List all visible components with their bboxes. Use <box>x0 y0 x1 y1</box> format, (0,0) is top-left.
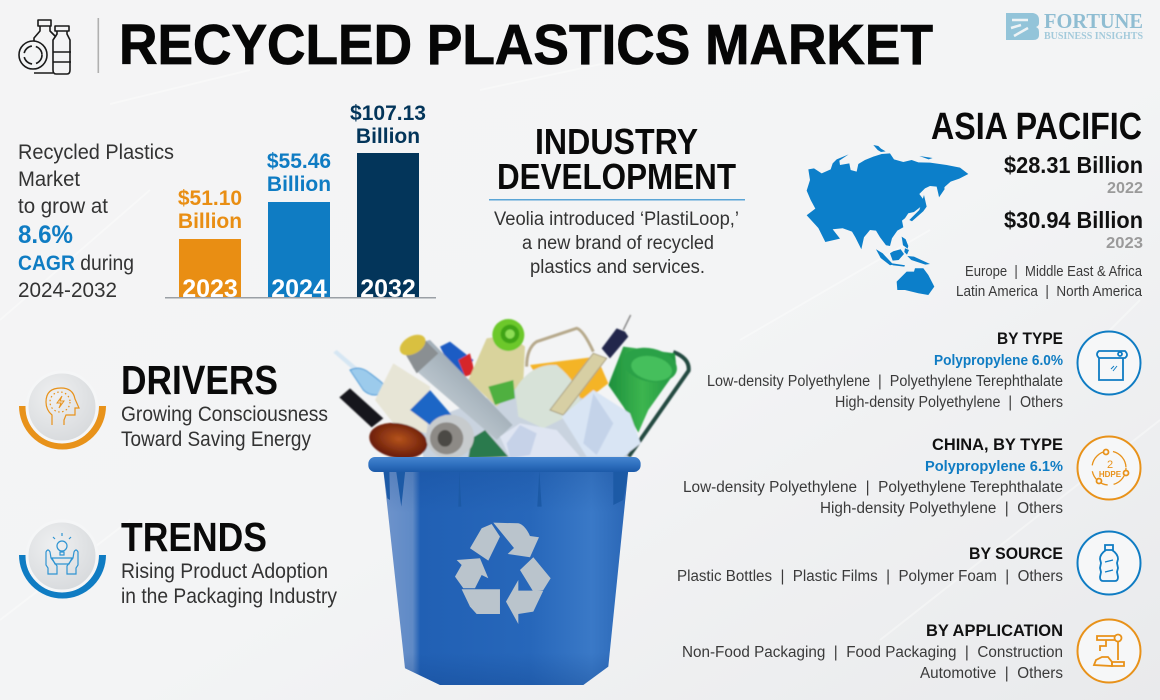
industry development: DEVELOPMENT <box>497 156 736 197</box>
bar 2024: Billion <box>267 173 331 196</box>
panel: drivers: Toward Saving Energy <box>121 428 311 451</box>
industry development: Veolia introduced ‘PlastiLoop,’ <box>494 209 739 230</box>
bar 2023: $51.10 <box>178 187 242 210</box>
segment: by application: Non-Food Packaging | Food Packaging | Construction <box>682 644 1063 661</box>
bar 2032 <box>350 102 426 303</box>
bar chart <box>165 102 436 303</box>
bar 2032: Billion <box>356 125 420 148</box>
segment: by application: BY APPLICATION <box>926 621 1063 640</box>
segment: China by type: High-density Polyethylene | Others <box>820 500 1063 517</box>
bar 2032: 2032 <box>360 275 416 303</box>
panel: drivers: DRIVERS <box>121 357 278 403</box>
segment: by type: High-density Polyethylene | Others <box>835 394 1063 411</box>
bar 2032: $107.13 <box>350 102 426 125</box>
segment: by source: BY SOURCE <box>969 544 1063 563</box>
bar 2023 <box>178 187 242 303</box>
bin contents: plastic waste <box>333 315 689 463</box>
header icon: recycled bottles <box>19 20 71 74</box>
panel: trends: Rising Product Adoption <box>121 560 328 583</box>
segment: by application <box>682 620 1140 682</box>
icon: plastic film roll <box>1078 332 1140 394</box>
icon: plastic bottle <box>1078 532 1140 594</box>
CAGR text block: 2024-2032 <box>18 279 117 302</box>
Asia Pacific heading and values: $30.94 Billion <box>1004 207 1143 233</box>
CAGR text block: CAGR during <box>18 252 134 275</box>
icon: robot arm and car <box>1078 620 1140 682</box>
CAGR text block: Market <box>18 168 80 191</box>
logo: Fortune Business Insights: BUSINESS INSIGHTS <box>1044 31 1143 42</box>
segment: by type: Polypropylene 6.0% <box>934 352 1063 369</box>
CAGR text block: Recycled Plastics <box>18 141 174 164</box>
CAGR text block: 8.6% <box>18 221 73 249</box>
industry development: INDUSTRY <box>535 121 698 162</box>
icon: hands with light bulb <box>22 521 102 595</box>
segment: by type: Low-density Polyethylene | Polyethylene Terephthalate <box>707 373 1063 390</box>
segment: by application: Automotive | Others <box>920 665 1063 682</box>
CAGR text block: to grow at <box>18 195 108 218</box>
bar 2023: 2023 <box>182 275 238 303</box>
recycling bin illustration <box>333 315 689 685</box>
industry development <box>489 121 745 278</box>
logo: Fortune Business Insights <box>1006 9 1143 42</box>
chart axis <box>165 297 436 298</box>
segment: by type: BY TYPE <box>997 329 1063 348</box>
segment: China by type: Low-density Polyethylene | Polyethylene Terephthalate <box>683 479 1063 496</box>
segment: China by type: CHINA, BY TYPE <box>932 435 1063 454</box>
Asia Pacific heading and values: 2022 <box>1107 180 1143 197</box>
panel: drivers <box>22 357 328 451</box>
Asia Pacific heading and values: 2023 <box>1106 235 1143 252</box>
panel: trends: in the Packaging Industry <box>121 585 337 608</box>
logo: Fortune Business Insights: FORTUNE <box>1044 9 1143 33</box>
segment: by source: Plastic Bottles | Plastic Films | Polymer Foam | Others <box>677 568 1063 585</box>
industry development: plastics and services. <box>530 257 705 278</box>
header divider <box>98 18 99 73</box>
Asia Pacific heading and values <box>931 106 1143 300</box>
title: RECYCLED PLASTICS MARKET <box>119 13 933 77</box>
segment: by source <box>677 532 1140 594</box>
panel: drivers: Growing Consciousness <box>121 403 328 426</box>
icon: head with energy bolt <box>22 372 102 446</box>
icon: HDPE 2: HDPE <box>1099 470 1122 479</box>
panel: trends: TRENDS <box>121 514 267 560</box>
industry development: a new brand of recycled <box>522 233 714 254</box>
bin rim <box>368 457 641 472</box>
segment: China by type <box>683 435 1140 517</box>
Asia Pacific heading and values: $28.31 Billion <box>1004 152 1143 178</box>
bar 2024 <box>267 150 331 303</box>
recycling symbol <box>455 523 551 624</box>
bar 2024: $55.46 <box>267 150 331 173</box>
CAGR text block <box>18 141 174 302</box>
bar 2024: 2024 <box>271 275 327 303</box>
panel: trends <box>22 514 337 608</box>
icon: HDPE 2 <box>1078 436 1140 500</box>
bin body <box>383 470 628 685</box>
bar 2023: Billion <box>178 210 242 233</box>
segment: by type <box>707 329 1140 411</box>
Asia Pacific heading and values: Latin America | North America <box>956 283 1143 300</box>
map: Asia Pacific <box>807 145 968 295</box>
icon: HDPE 2: 2 <box>1107 459 1113 471</box>
segment: China by type: Polypropylene 6.1% <box>925 458 1063 475</box>
